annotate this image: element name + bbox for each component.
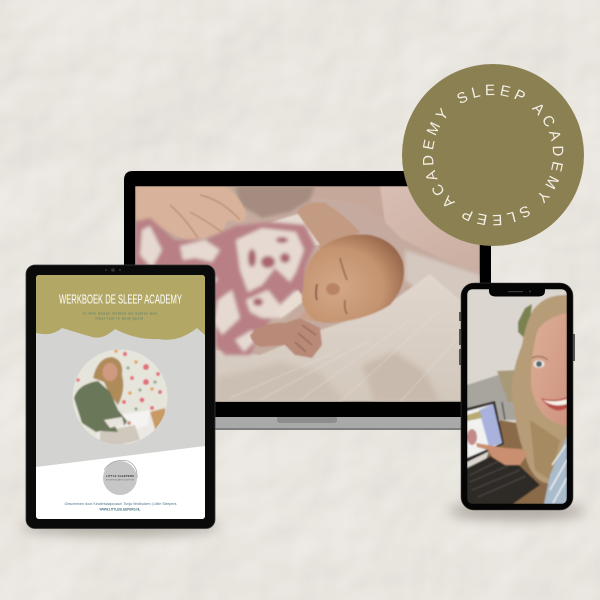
- sleeve area: [380, 186, 465, 256]
- sweater: [74, 381, 127, 432]
- hair: [512, 295, 567, 484]
- baby head: [302, 234, 404, 323]
- laptop: [124, 171, 491, 430]
- baby face: [340, 258, 347, 314]
- workbook header band: [36, 275, 205, 340]
- face: [531, 313, 567, 425]
- baby hand: [250, 318, 322, 358]
- laptop photo: sleeping newborn: [135, 186, 480, 402]
- workbook subtitle: In drie weken werken we samen aan: [83, 312, 157, 316]
- device shadows: [20, 502, 585, 536]
- hair: [93, 357, 123, 405]
- workbook title: WERKBOEK DE SLEEP ACADEMY: [59, 292, 182, 306]
- badge circular text: SLEEP ACADEMY SLEEP ACADEMY: [422, 84, 564, 226]
- logo: Little Sleepers: [103, 460, 137, 495]
- phone buttons: [459, 312, 575, 365]
- laptop base: [130, 417, 480, 430]
- workbook white footer: [36, 446, 205, 519]
- logo: Little Sleepers: LITTLE SLEEPERS: [106, 474, 134, 478]
- phone body: [461, 283, 573, 510]
- white knit blanket: [216, 274, 480, 402]
- logo: Little Sleepers: KINDERSLAAPCOACHING: [106, 478, 135, 482]
- tablet screen: [36, 275, 205, 519]
- laptop in photo: [467, 401, 504, 462]
- workbook credits: [64, 502, 176, 510]
- keyboard: [467, 450, 540, 504]
- workbook credits: Geschreven door Kinderslaapcoach Tonja Veldhuizen | Little Sleepers: [64, 502, 177, 506]
- chair: [496, 370, 515, 402]
- floral outfit: [135, 218, 315, 355]
- phone: [459, 283, 575, 510]
- tablet camera: [105, 268, 121, 272]
- laptop bezel: [124, 171, 491, 417]
- eye: [534, 360, 544, 368]
- face: [102, 363, 118, 381]
- phone notch: [489, 289, 545, 296]
- table: [486, 419, 549, 504]
- badge: Sleep Academy circle: [402, 64, 584, 246]
- crib: [138, 418, 154, 438]
- workbook subtitle: [83, 312, 157, 320]
- pointing hand: [476, 443, 527, 465]
- phone screen: selfie with laptop: [467, 289, 567, 504]
- workbook subtitle: meer rust in jouw gezin.: [96, 316, 144, 320]
- workbook credits: WWW.LITTLESLEEPERS.NL: [100, 508, 141, 512]
- plant: [518, 304, 532, 338]
- shirt: [544, 436, 567, 504]
- mouth: [541, 397, 567, 410]
- blanket behind: [270, 214, 320, 246]
- tablet: workbook: [26, 265, 215, 528]
- tablet body: [26, 265, 215, 528]
- circular photo: coach with crib: [72, 350, 168, 444]
- adult hands: [135, 186, 247, 240]
